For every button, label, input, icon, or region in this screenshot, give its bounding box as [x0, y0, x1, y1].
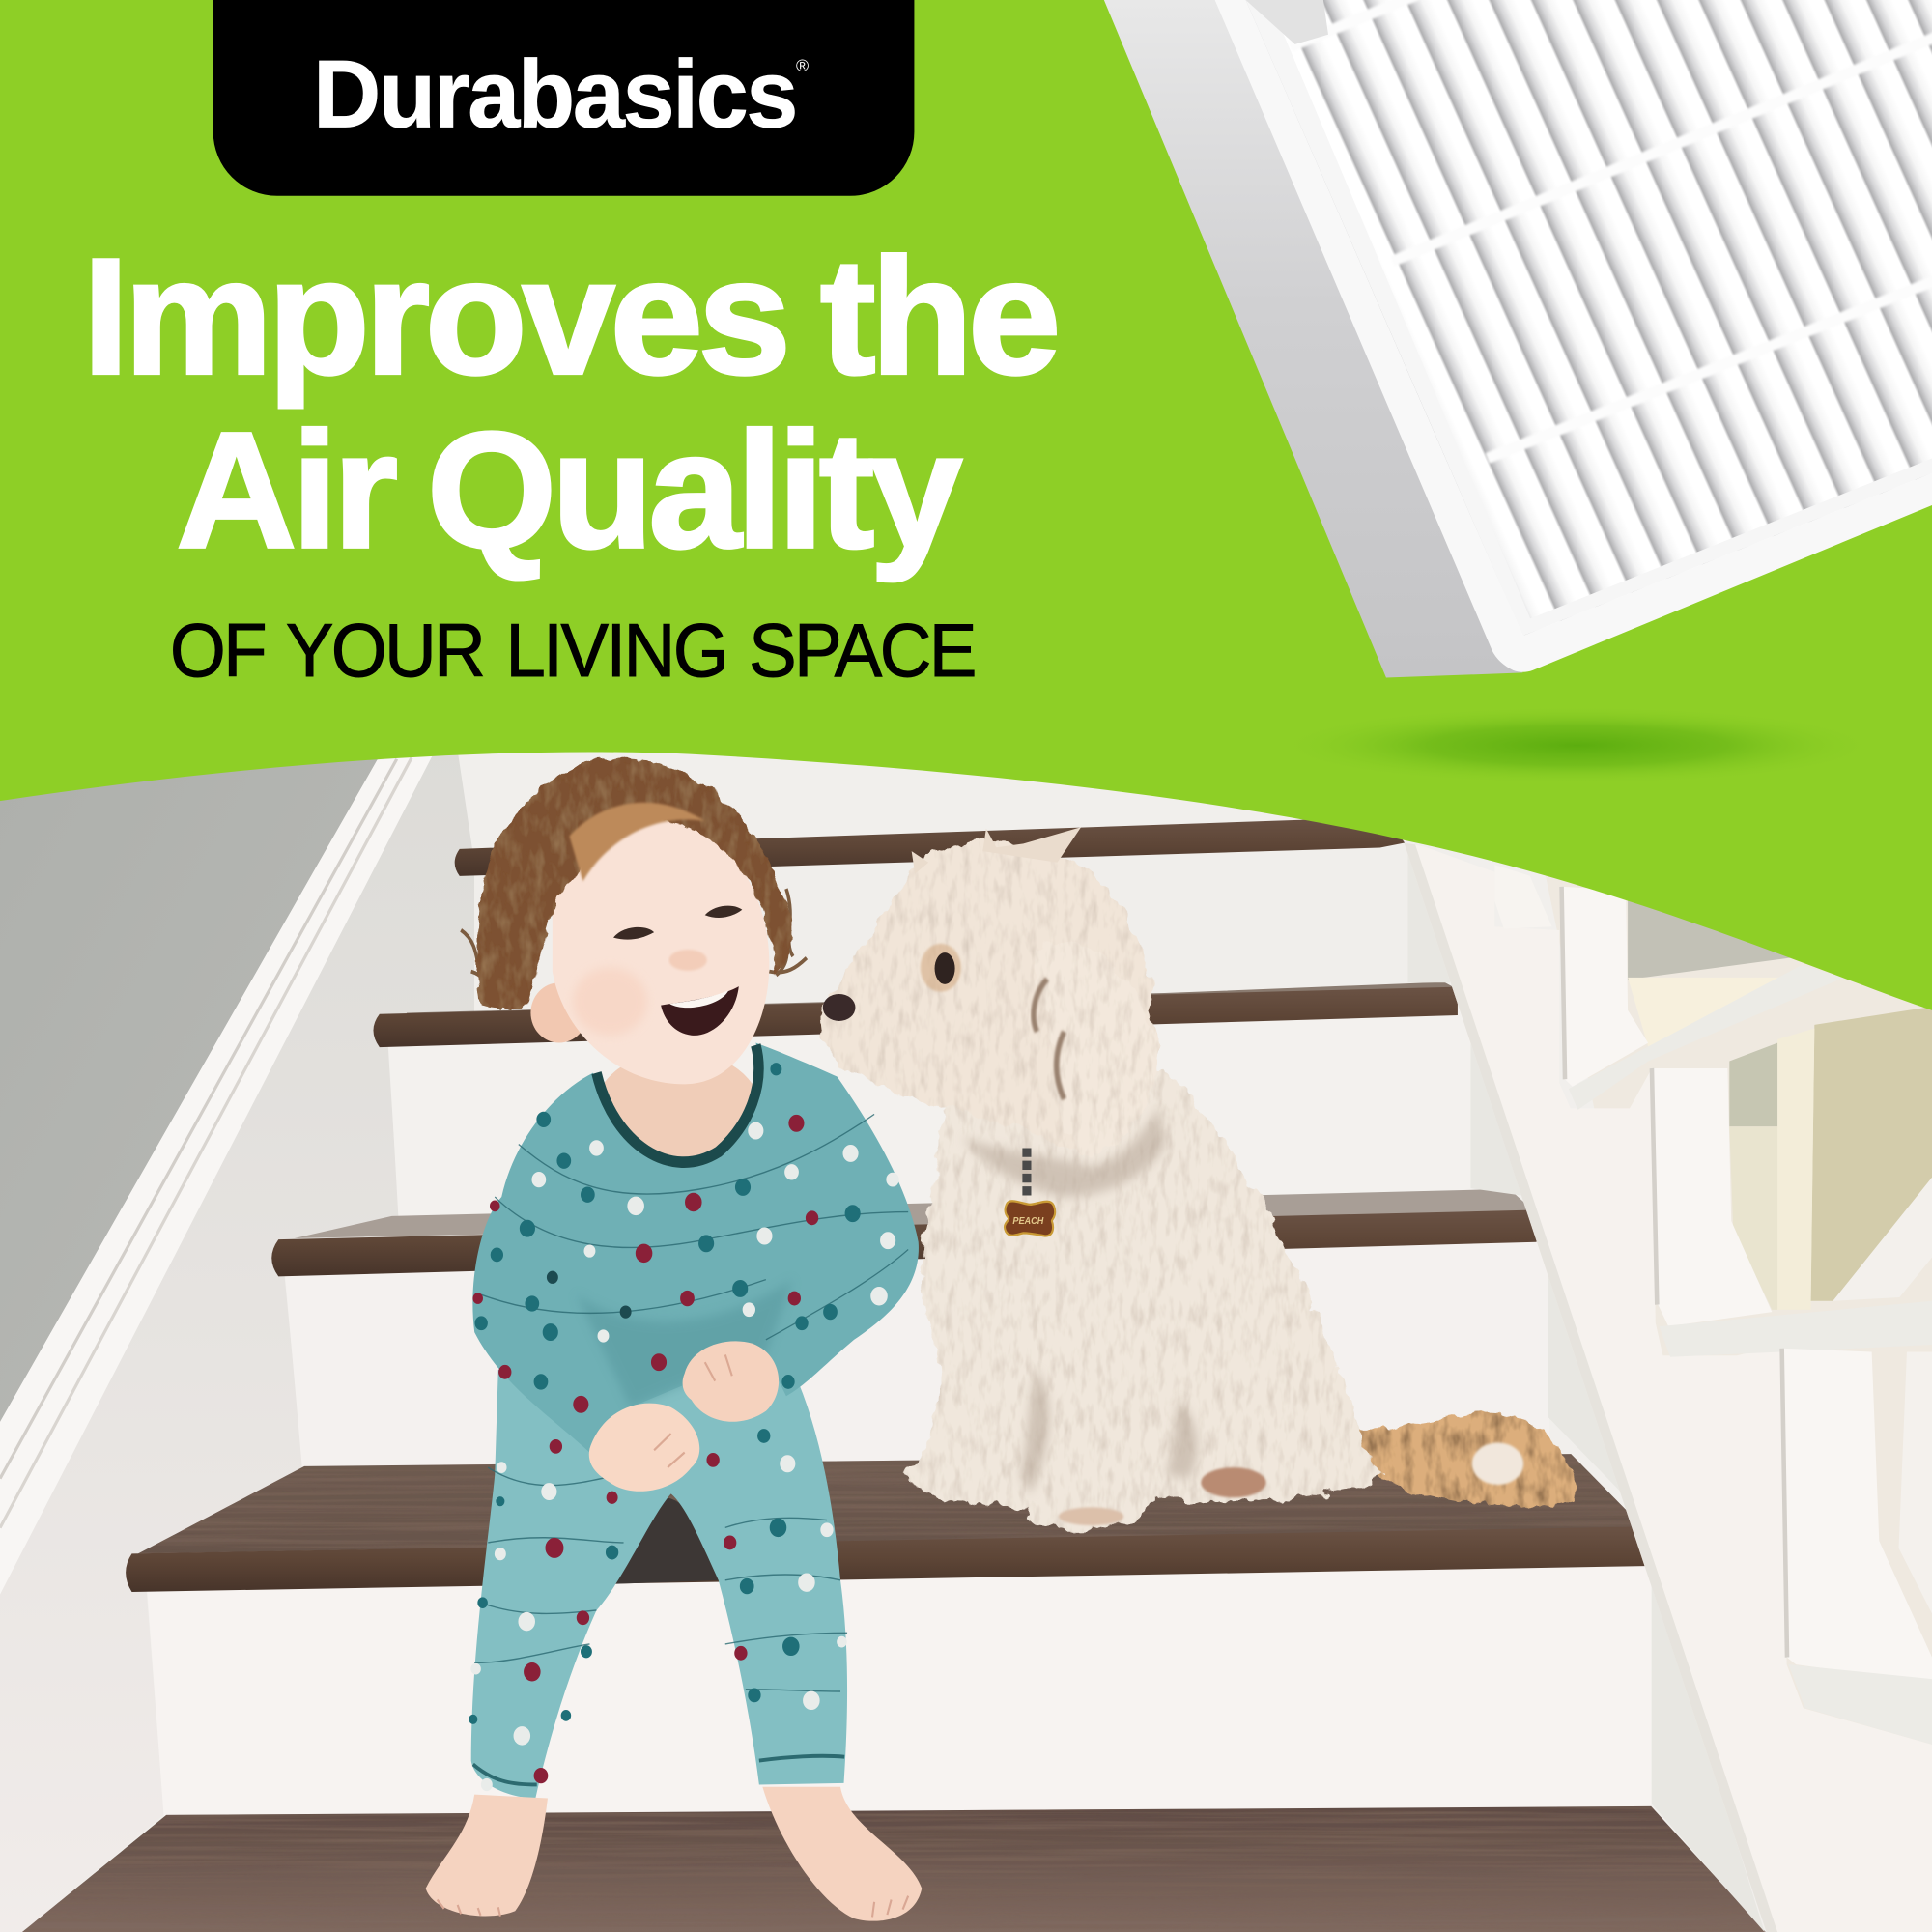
child ear — [530, 982, 587, 1043]
stringer and balusters, background room — [1405, 836, 1932, 1932]
child left hand — [589, 1404, 699, 1492]
stair riser 3 — [285, 1233, 1550, 1479]
stair tread 2 — [373, 987, 1458, 1047]
left white moulding — [0, 755, 433, 1595]
hair highlight — [569, 803, 705, 881]
pajama shirt — [472, 1043, 919, 1453]
stair tread 3 top — [295, 1189, 1535, 1238]
pajama pants — [471, 1370, 847, 1798]
stair tread 4 top — [138, 1454, 1644, 1553]
light strings — [474, 1114, 908, 1691]
filter grey side — [1104, 0, 1523, 678]
filter pleats — [1208, 0, 1932, 653]
child right hand — [683, 1341, 779, 1422]
shirt collar — [596, 1045, 758, 1162]
dog — [820, 827, 1379, 1529]
corner tab — [1246, 0, 1328, 44]
baluster 1 — [1563, 887, 1648, 1087]
headline: Air Quality — [176, 398, 962, 582]
wedge walls beside the risers — [1407, 843, 1765, 1932]
logo wordmark: Durabasics — [313, 41, 796, 148]
child cheeks and mouth — [573, 968, 739, 1036]
dog tail — [1352, 1413, 1577, 1506]
rail 1 — [1569, 965, 1844, 1110]
stringer edge — [1405, 843, 1777, 1932]
small upper box — [1494, 865, 1552, 929]
rail 2 — [1660, 1301, 1932, 1357]
pant cuffs — [473, 1756, 844, 1784]
stair riser 4 — [147, 1559, 1651, 1817]
main stringer — [1405, 843, 1932, 1932]
baluster edges — [1562, 887, 1787, 1658]
subheading: OF YOUR LIVING SPACE — [170, 610, 975, 693]
air filter product — [1104, 0, 1932, 678]
dog fur spikes — [912, 827, 1081, 873]
stair tread 2 top — [407, 982, 1458, 1018]
baluster 3 — [1781, 1349, 1932, 1683]
dog ear — [1037, 943, 1155, 1155]
background room — [1537, 836, 1932, 1932]
stair riser 2 — [388, 1005, 1475, 1233]
child eyes — [613, 906, 742, 940]
left grey wall — [0, 752, 382, 1422]
baluster 2 — [1652, 1068, 1772, 1326]
headline: Improves the — [82, 224, 1056, 409]
pleat cross ribs — [1290, 0, 1932, 458]
stair riser 1 — [474, 838, 1470, 1023]
stair tread 4 nose — [126, 1526, 1645, 1592]
dog eye — [921, 944, 961, 992]
inner frame lip — [1246, 0, 1932, 636]
dog leg gaps and neck shadow — [962, 1107, 1198, 1493]
filter white frame — [1215, 0, 1932, 672]
dog tag — [1005, 1201, 1055, 1236]
diagonal rail beyond — [1833, 1178, 1932, 1301]
baluster 4 beyond — [1899, 1351, 1932, 1613]
shadow between the legs — [613, 1497, 719, 1584]
dog body — [908, 1069, 1379, 1529]
child neck and chest — [593, 1050, 762, 1179]
panel: green wave background — [0, 0, 1932, 1010]
logo badge — [213, 0, 914, 196]
dog collar — [1020, 1148, 1033, 1197]
child face — [553, 821, 769, 1084]
pajama light bulb print — [469, 1064, 898, 1790]
shirt shading — [576, 1280, 793, 1407]
registered mark: ® — [796, 56, 809, 75]
floating shadow under filter — [1275, 706, 1879, 784]
headline — [82, 224, 1056, 582]
dog tag: PEACH — [1012, 1216, 1044, 1227]
rail 3 — [1789, 1664, 1932, 1745]
dog nose — [823, 994, 855, 1021]
child hair wisps — [461, 889, 807, 1009]
stair tread 3 — [271, 1210, 1537, 1276]
child hair — [476, 758, 792, 1009]
left side wall beside the stairs — [0, 739, 474, 1932]
child left foot — [426, 1795, 548, 1917]
dog paws — [1059, 1467, 1266, 1525]
dog head — [820, 841, 1155, 1155]
child and dog drawn in local coordinates — [426, 758, 1577, 1921]
stair floor tread 5 — [22, 1806, 1766, 1932]
panel: stair photo — [0, 739, 1932, 1932]
child — [426, 758, 922, 1921]
child nose shade — [669, 950, 707, 971]
stair tread 1 — [455, 817, 1405, 876]
child right foot — [762, 1787, 922, 1921]
